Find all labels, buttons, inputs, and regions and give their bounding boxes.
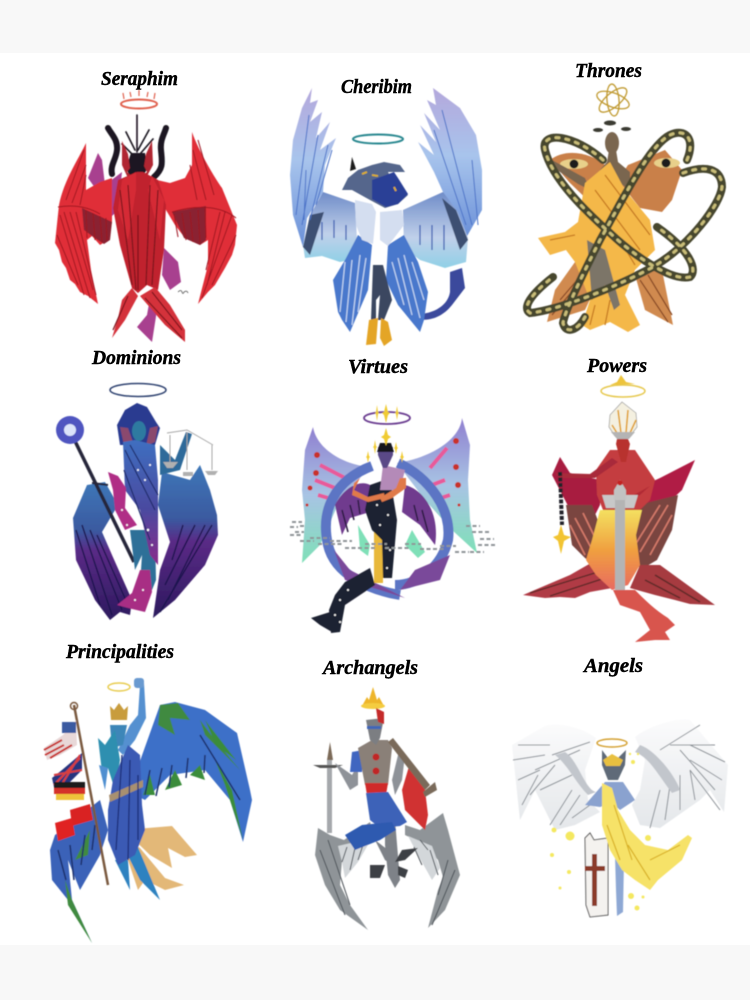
gray pebble ring — [290, 522, 496, 552]
panel: Principalities — [44, 641, 252, 943]
armor and head — [358, 708, 392, 795]
mint lower panel — [358, 525, 425, 558]
starry body and tail — [311, 478, 397, 633]
title: Cheribim: Cheribim — [341, 76, 412, 98]
legs and talons — [366, 265, 392, 346]
left wing — [73, 482, 132, 620]
right butterfly wing — [397, 418, 477, 553]
panel: Powers — [523, 355, 715, 642]
fire glow — [586, 510, 642, 590]
title: Angels: Angels — [582, 655, 643, 677]
figure: Angels — [512, 719, 728, 917]
lower feathers — [523, 555, 715, 605]
flag: red flag — [55, 818, 75, 841]
left globe wing — [50, 800, 108, 943]
title: Principalities: Principalities — [65, 641, 174, 663]
staff — [74, 705, 108, 885]
figure: Thrones — [527, 84, 722, 332]
flag: USA — [44, 720, 77, 760]
panel: Cheribim — [290, 76, 482, 346]
halo — [597, 739, 627, 747]
right white wing — [632, 719, 728, 828]
left butterfly wing — [302, 427, 370, 563]
lion tail — [410, 268, 465, 320]
face — [126, 153, 148, 177]
panel: Thrones — [527, 60, 722, 332]
figure: Principalities — [44, 678, 252, 943]
circular blue wings — [326, 463, 450, 598]
hooded head — [117, 403, 160, 446]
yellow robe — [602, 783, 692, 890]
gray right wing — [405, 813, 460, 928]
left wing — [55, 143, 112, 304]
panel: Virtues — [290, 356, 496, 633]
left wing — [290, 88, 358, 262]
chain and star mace — [553, 472, 571, 554]
torso, head and arms — [352, 443, 406, 502]
scales arm — [160, 430, 218, 476]
body — [555, 434, 655, 520]
eyed rings — [527, 133, 722, 330]
figure: Seraphim — [55, 90, 237, 342]
body — [98, 678, 160, 900]
glowing dots — [550, 753, 651, 910]
panel: Dominions — [56, 347, 218, 620]
legs and claws — [370, 820, 418, 888]
head feathers — [122, 141, 153, 177]
flag: UK — [52, 753, 82, 787]
staff loop — [70, 702, 78, 710]
panel: Archangels — [313, 657, 460, 930]
title: Powers: Powers — [586, 355, 647, 377]
legs — [130, 530, 156, 590]
upper left wing — [552, 457, 610, 572]
tan feet feathers — [122, 826, 197, 890]
staff and orb — [56, 416, 134, 562]
leg — [615, 855, 624, 916]
red scarf — [402, 763, 428, 830]
signature — [178, 290, 188, 294]
great sword — [602, 480, 638, 590]
crown — [609, 402, 637, 439]
title: Thrones: Thrones — [575, 60, 642, 82]
panel: Seraphim — [55, 68, 237, 342]
upper right wing — [630, 460, 695, 570]
gold crown halo — [362, 687, 384, 706]
head — [602, 750, 626, 780]
flag: Germany — [54, 782, 85, 800]
blue shoulder — [350, 750, 363, 772]
golden robe — [538, 162, 655, 332]
title: Virtues: Virtues — [348, 356, 408, 378]
halo: spiked crown ring — [121, 90, 157, 108]
title: Archangels: Archangels — [321, 657, 418, 679]
crown and halo — [108, 683, 130, 720]
right globe wing — [135, 702, 252, 842]
drapery: purple cloth — [88, 153, 181, 342]
halo: teal ring — [353, 134, 403, 144]
panel: Angels — [512, 655, 728, 917]
atom halo — [595, 84, 631, 116]
figure: Powers — [523, 375, 715, 642]
flag: China — [70, 804, 93, 826]
gray left wing — [315, 822, 375, 930]
wings with eyes — [547, 150, 682, 325]
golden sword — [374, 528, 383, 583]
blue skirt and sash — [345, 792, 407, 850]
trumpet — [388, 738, 437, 797]
figure: Cheribim — [290, 88, 482, 346]
left white wing — [512, 724, 600, 830]
body feathers — [112, 172, 185, 342]
figure: Dominions — [56, 384, 218, 620]
halo and stars — [364, 404, 410, 463]
arms and body — [585, 782, 635, 810]
tail feathers — [333, 235, 428, 332]
halo: navy ring — [110, 384, 166, 396]
figure: Virtues — [290, 404, 496, 633]
body, head and arm — [545, 132, 630, 190]
sword — [313, 742, 343, 833]
title: Dominions: Dominions — [91, 347, 181, 369]
starry robe — [108, 440, 158, 612]
three heads — [342, 157, 408, 208]
chest — [355, 200, 404, 246]
halo with flames — [601, 375, 645, 397]
halo ring — [361, 703, 385, 709]
arms — [335, 755, 405, 795]
right wing — [153, 465, 218, 618]
shield — [585, 833, 608, 917]
figure: Archangels — [313, 687, 460, 930]
right wing — [403, 88, 482, 268]
floating eyes — [593, 120, 631, 132]
arms and head — [108, 115, 166, 177]
legs and feet — [613, 590, 675, 642]
title: Seraphim: Seraphim — [101, 68, 178, 90]
right wing — [157, 132, 237, 304]
